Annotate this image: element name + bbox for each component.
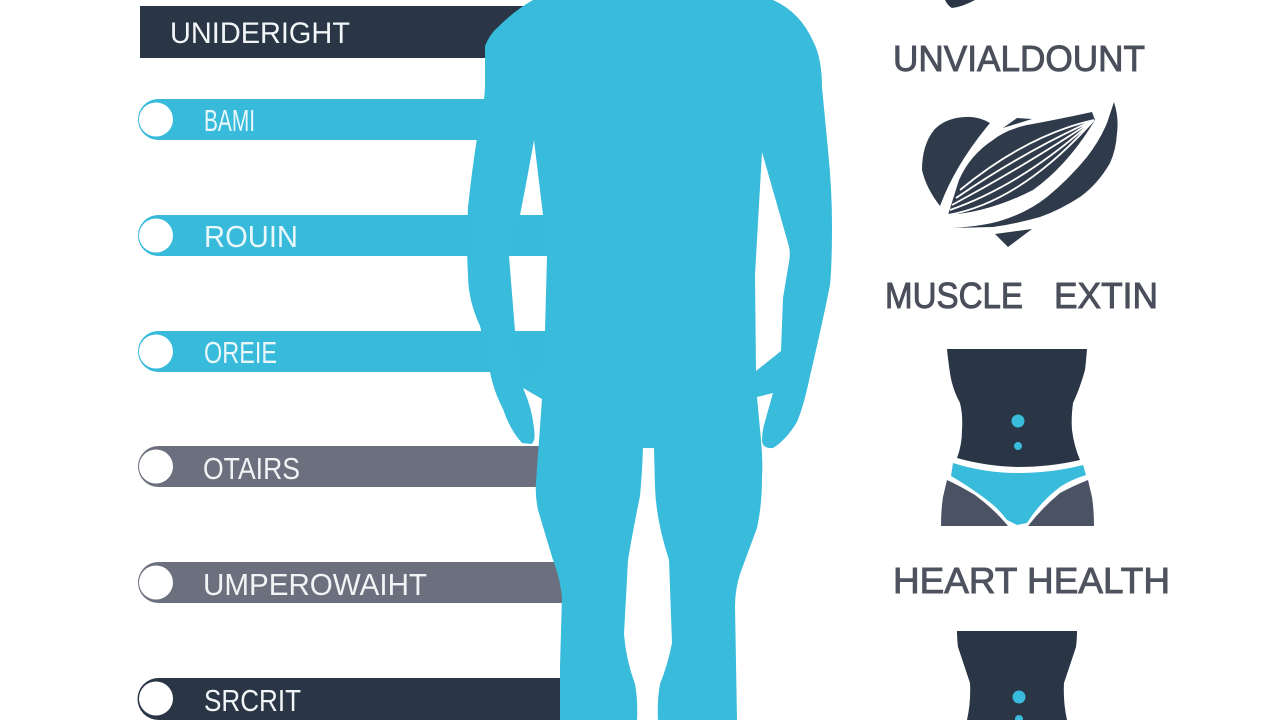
label: HEART HEALTH: HEART HEALTH	[893, 560, 1170, 601]
heading bar: UNIDERIGHT: UNIDERIGHT	[170, 17, 350, 50]
heading bar: UNIDERIGHT	[140, 6, 535, 58]
icon: muscle heart	[922, 102, 1118, 247]
bar: ROUIN: ROUIN	[204, 219, 298, 254]
label: MUSCLE EXTIN	[885, 275, 1158, 316]
bar: UMPEROWAIHT: UMPEROWAIHT	[203, 567, 427, 602]
panel: left category list	[138, 6, 570, 720]
label: MUSCLE EXTIN: MUSCLE	[885, 275, 1023, 316]
bar: OREIE: OREIE	[204, 335, 277, 370]
label: UNVIALDOUNT: UNVIALDOUNT	[893, 38, 1145, 79]
body silhouette	[467, 0, 832, 720]
bar: BAMI: BAMI	[204, 103, 255, 138]
icon: waist and underwear	[941, 349, 1094, 526]
bar: SRCRIT: SRCRIT	[204, 683, 301, 718]
panel: right health icons and labels	[885, 0, 1170, 720]
bar: UMPEROWAIHT	[138, 562, 570, 603]
label: MUSCLE EXTIN: EXTIN	[1054, 275, 1158, 316]
icon: waist partial	[957, 631, 1077, 720]
bar: SRCRIT	[138, 678, 570, 720]
bar: BAMI	[138, 99, 538, 140]
bar: OTAIRS: OTAIRS	[203, 451, 300, 486]
bar: OTAIRS	[138, 446, 548, 487]
bar: OREIE	[138, 331, 548, 372]
bar: ROUIN	[138, 215, 548, 256]
icon: partial top shape	[945, 0, 975, 8]
